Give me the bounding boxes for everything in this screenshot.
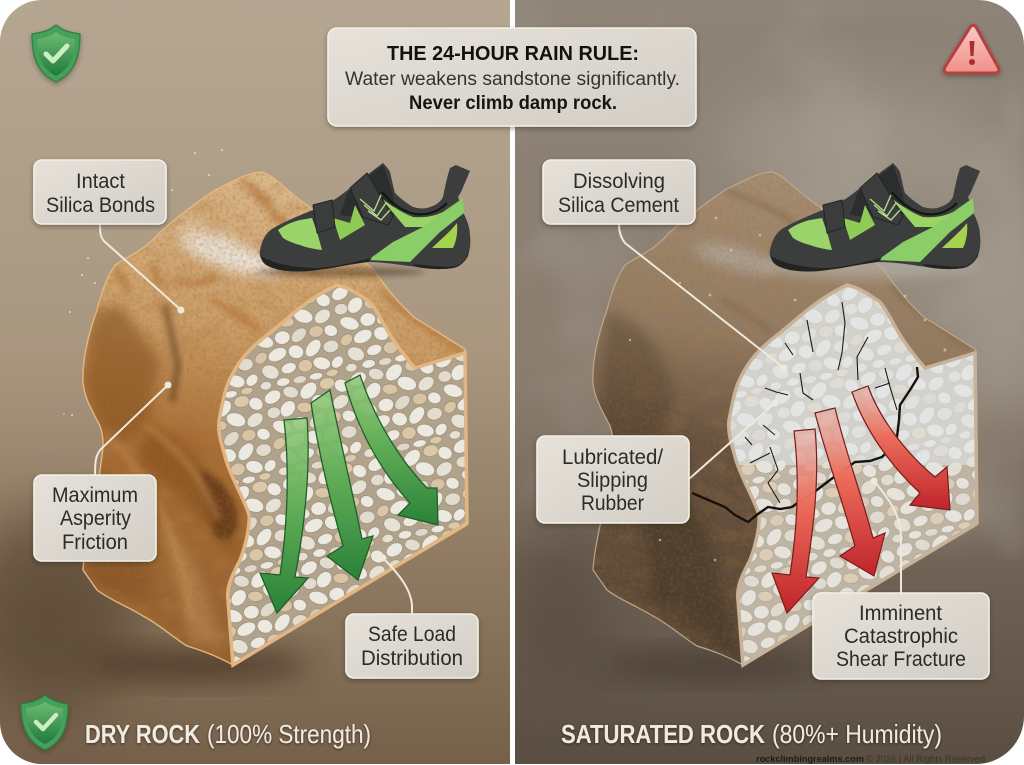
- arrow: centre: [815, 408, 885, 576]
- callout: safe load distribution: [346, 614, 478, 678]
- callout: lubricated slipping rubber: Rubber: [581, 492, 644, 515]
- panel divider: [510, 0, 515, 765]
- leader dots: [164, 306, 878, 562]
- illustration: saturated sandstone block: [590, 170, 980, 670]
- heading: dry rock: (100% Strength): [207, 719, 371, 749]
- callout: maximum asperity friction: Maximum: [52, 484, 138, 507]
- title callout: Water weakens sandstone significantly.: [345, 69, 680, 90]
- wet specks on saturated rock: [629, 217, 946, 561]
- heading: dry rock: DRY ROCK: [85, 719, 200, 749]
- callout: safe load distribution: Distribution: [361, 647, 463, 670]
- callout: imminent catastrophic shear fracture: Shear Fracture: [836, 648, 966, 671]
- footer credit: © 2026 | All Rights Reserved: [866, 754, 985, 765]
- callout: lubricated slipping rubber: Slipping: [577, 469, 648, 492]
- callout: safe load distribution: Safe Load: [368, 623, 456, 646]
- arrows: red failure load paths: [772, 386, 950, 613]
- arrow: right: [345, 375, 438, 525]
- arrows: green safe load paths: [260, 375, 438, 613]
- callout: dissolving silica cement: Silica Cement: [558, 194, 679, 217]
- panel: saturated rock background: [510, 0, 1024, 765]
- cut face: pebble cross-section: [219, 285, 467, 665]
- callout: intact silica bonds: Silica Bonds: [46, 194, 155, 217]
- arrow: centre: [311, 390, 373, 580]
- callout: intact silica bonds: [34, 160, 166, 224]
- title callout: [328, 28, 696, 126]
- cracks: fine fissures in cut face: [745, 302, 897, 503]
- arrow: right: [852, 386, 950, 510]
- icon: top green shield check: [32, 25, 80, 82]
- callout: dissolving silica cement: Dissolving: [573, 170, 665, 193]
- icon: right climbing shoe: [760, 163, 980, 278]
- heading: dry rock: [85, 719, 371, 749]
- callout: imminent catastrophic shear fracture: [813, 593, 989, 679]
- callout: imminent catastrophic shear fracture: Catastrophic: [844, 625, 958, 648]
- icon: left climbing shoe: [255, 163, 470, 277]
- crack: main shear fracture: [692, 367, 918, 522]
- callout: lubricated slipping rubber: [537, 436, 689, 523]
- arrow: left: [260, 418, 308, 613]
- callout: intact silica bonds: Intact: [76, 170, 125, 193]
- heading: saturated rock: SATURATED ROCK: [561, 719, 765, 749]
- title callout: Never climb damp rock.: [409, 93, 617, 114]
- footer credit: rockclimbingrealms.com: [756, 754, 864, 765]
- footer credit: [756, 754, 985, 765]
- callout: maximum asperity friction: [34, 475, 156, 561]
- callout: lubricated slipping rubber: Lubricated/: [562, 446, 663, 469]
- dust specks: dry side: [63, 149, 223, 416]
- callout: imminent catastrophic shear fracture: Imminent: [859, 602, 942, 625]
- callout: maximum asperity friction: Friction: [62, 531, 128, 554]
- cut face: cracked pebble cross-section: [725, 280, 980, 670]
- leader lines: callout connectors: [95, 224, 901, 614]
- heading: saturated rock: (80%+ Humidity): [772, 719, 942, 749]
- callout: maximum asperity friction: Asperity: [60, 507, 131, 530]
- panel: dry rock background: [0, 0, 510, 765]
- heading: saturated rock: [561, 719, 942, 749]
- icon: warning triangle: [944, 25, 999, 73]
- illustration: dry sandstone block: [80, 170, 470, 670]
- icon: bottom green shield check: [21, 695, 68, 750]
- title callout: THE 24-HOUR RAIN RULE:: [387, 43, 639, 65]
- callout: dissolving silica cement: [543, 160, 695, 224]
- arrow: left: [772, 429, 819, 613]
